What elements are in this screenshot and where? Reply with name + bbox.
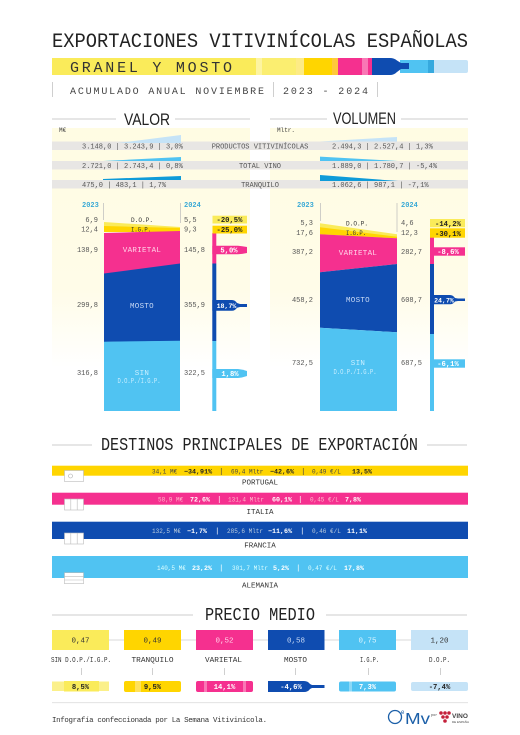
destination: francia: 285,6 Mltr xyxy=(227,528,263,535)
heading: valor: VALOR xyxy=(124,111,170,129)
side bars: valor variation: 18,7% xyxy=(217,303,236,310)
chart: volumen: VARIETAL xyxy=(339,250,377,258)
price variation tags: 7,3% xyxy=(359,684,377,692)
chart: valor: 12,4 xyxy=(81,226,98,234)
chart: valor: D.O.P. xyxy=(131,217,153,224)
price boxes: 1,20 xyxy=(430,638,449,646)
destination: alemania: 17,8% xyxy=(344,565,365,573)
destination: francia: 132,5 M€ xyxy=(152,528,181,535)
side bars: valor variation xyxy=(212,216,247,411)
side bars: volumen variation: -14,2% xyxy=(435,221,462,229)
chart: volumen: 282,7 xyxy=(401,249,422,257)
destination: francia: −11,6% xyxy=(268,528,293,536)
destination: francia: 0,46 €/L xyxy=(312,528,341,535)
chart: volumen: 732,5 xyxy=(292,360,313,368)
destination: italia: | xyxy=(298,496,303,504)
comparison rows: 475,0 | 483,1 | 1,7% xyxy=(82,182,167,190)
chart: volumen: I.G.P. xyxy=(346,230,366,237)
logo: vino de españa xyxy=(431,711,469,724)
chart: valor: VARIETAL xyxy=(123,247,161,255)
destination: alemania: 140,5 M€ xyxy=(157,565,186,572)
comparison rows: PRODUCTOS VITIVINÍCOLAS xyxy=(212,142,308,152)
chart: volumen: 687,5 xyxy=(401,360,422,368)
destination: portugal: −34,91% xyxy=(184,468,213,476)
logo: oemv xyxy=(388,710,430,728)
logo: oemv: e xyxy=(401,710,405,716)
destination: portugal: −42,6% xyxy=(270,468,295,476)
comparison rows: TRANQUILO xyxy=(241,182,279,190)
chart: volumen: SIN xyxy=(351,360,365,368)
destination: italia: | xyxy=(217,496,222,504)
price variation tags: 14,1% xyxy=(214,684,236,692)
chart: valor: 5,5 xyxy=(184,217,197,225)
comparison rows: 1.889,0 | 1.780,7 | -5,4% xyxy=(332,163,438,171)
chart: valor: 2023 xyxy=(82,202,99,210)
side bars: valor variation: -20,5% xyxy=(217,217,243,225)
price boxes xyxy=(52,630,468,650)
chart: valor: 2024 xyxy=(184,202,201,210)
units: M€ xyxy=(59,127,67,134)
chart: volumen: D.O.P./I.G.P. xyxy=(334,369,376,377)
destination: alemania: 0,47 €/L xyxy=(308,565,337,572)
chart: valor: 145,8 xyxy=(184,247,205,255)
destination: francia: −1,7% xyxy=(187,528,208,536)
chart: valor: 299,8 xyxy=(77,302,98,310)
logo: oemv: Mv xyxy=(405,711,430,728)
side bars: valor variation: 5,0% xyxy=(220,248,238,256)
destination: italia xyxy=(52,493,468,517)
heading: precio medio: PRECIO MEDIO xyxy=(205,605,315,626)
price variation tags xyxy=(52,681,468,692)
title: EXPORTACIONES VITIVINÍCOLAS ESPAÑOLAS xyxy=(52,29,468,54)
destination: portugal xyxy=(52,466,468,488)
price category labels: MOSTO xyxy=(284,657,307,665)
destination: alemania xyxy=(52,556,468,591)
chart: volumen: 387,2 xyxy=(292,249,313,257)
side bars: valor variation: 1,8% xyxy=(221,371,239,379)
destination: italia: 60,1% xyxy=(272,496,293,504)
chart: valor: 355,9 xyxy=(184,302,205,310)
chart: volumen: 458,2 xyxy=(292,297,313,305)
destination: italia: 72,6% xyxy=(190,496,211,504)
destination: alemania: 301,7 Mltr xyxy=(232,565,268,572)
comparison rows xyxy=(52,135,468,190)
chart: valor: 316,8 xyxy=(77,370,98,378)
destination: portugal: 0,49 €/L xyxy=(312,468,341,476)
subtitle: ACUMULADO ANUAL NOVIEMBRE xyxy=(70,87,264,98)
destination: portugal: | xyxy=(219,468,224,476)
chart: valor: MOSTO xyxy=(130,303,154,311)
destination: italia: ITALIA xyxy=(246,509,274,517)
price boxes: 0,52 xyxy=(215,638,234,646)
price boxes: 0,58 xyxy=(287,638,305,646)
destination: alemania: 23,2% xyxy=(192,565,213,573)
price category labels: SIN D.O.P./I.G.P. xyxy=(51,657,111,665)
units xyxy=(59,127,295,134)
destination: francia: | xyxy=(300,528,305,536)
price variation tags: -7,4% xyxy=(429,684,451,692)
price variation tags: -4,6% xyxy=(280,684,302,692)
side bars: volumen variation: -8,6% xyxy=(437,249,459,257)
price variation tags: 9,5% xyxy=(144,684,162,692)
comparison rows: TOTAL VINO xyxy=(239,163,281,171)
destination: portugal: | xyxy=(301,468,306,476)
destination: portugal: 69,4 Mltr xyxy=(231,468,264,476)
chart: volumen: 2023 xyxy=(297,202,314,210)
destination: francia: 11,1% xyxy=(347,528,368,536)
destination: portugal: PORTUGAL xyxy=(242,480,278,488)
destination: francia: | xyxy=(215,528,220,536)
destination: alemania: | xyxy=(296,565,301,573)
destination: italia: 131,4 Mltr xyxy=(228,496,264,504)
chart: valor: SIN xyxy=(135,370,149,378)
chart: valor: 138,9 xyxy=(77,247,98,255)
logo: vino de españa: por xyxy=(431,713,437,718)
comparison rows: 2.494,3 | 2.527,4 | 1,3% xyxy=(332,144,434,152)
banner: granel y mosto: GRANEL Y MOSTO xyxy=(70,60,232,77)
price category labels xyxy=(51,657,450,675)
units: Mltr. xyxy=(277,127,295,134)
comparison rows: 3.148,0 | 3.243,9 | 3,0% xyxy=(82,144,184,152)
comparison rows: 1.062,6 | 987,1 | -7,1% xyxy=(332,182,429,190)
destination: italia: 7,8% xyxy=(345,496,362,504)
chart: volumen: 4,6 xyxy=(401,220,414,228)
chart: volumen: 12,3 xyxy=(401,230,418,238)
side bars: volumen variation: -30,1% xyxy=(435,231,462,239)
chart: volumen: 2024 xyxy=(401,202,418,210)
subtitle: 2023 - 2024 xyxy=(283,87,368,98)
side bars: volumen variation: -6,1% xyxy=(437,361,459,369)
destination: alemania: | xyxy=(219,565,224,573)
side bars: valor variation: -25,0% xyxy=(217,227,243,235)
destination: francia: FRANCIA xyxy=(244,543,276,551)
chart: valor: 322,5 xyxy=(184,370,205,378)
side bars: volumen variation: 24,7% xyxy=(434,298,454,304)
price category labels: VARIETAL xyxy=(205,657,243,665)
chart: volumen: D.O.P. xyxy=(346,220,368,228)
destination: francia xyxy=(52,522,468,551)
destination: alemania: 5,2% xyxy=(273,565,290,573)
comparison rows: 2.721,0 | 2.743,4 | 0,8% xyxy=(82,163,184,171)
chart: valor: I.G.P. xyxy=(131,226,151,234)
price boxes: 0,49 xyxy=(143,638,162,646)
chart: valor: 9,3 xyxy=(184,226,197,234)
price category labels: TRANQUILO xyxy=(132,657,174,665)
chart: valor: D.O.P./I.G.P. xyxy=(118,378,160,386)
price boxes: 0,75 xyxy=(358,638,377,646)
logo: vino de españa: VINO xyxy=(452,713,468,720)
price category labels: I.G.P. xyxy=(360,657,379,665)
destination: italia: 0,45 €/L xyxy=(310,496,339,504)
chart: volumen: MOSTO xyxy=(346,297,370,305)
chart: volumen xyxy=(292,202,422,411)
chart: volumen: 608,7 xyxy=(401,297,422,305)
chart: volumen: 17,6 xyxy=(296,230,313,238)
side bars: volumen variation xyxy=(430,219,465,411)
chart: volumen: 5,3 xyxy=(300,220,313,228)
subtitle xyxy=(52,82,378,98)
destination: portugal: 13,5% xyxy=(352,468,373,476)
price boxes: 0,47 xyxy=(71,638,90,646)
footer credit: Infografía confeccionada por La Semana Vitivinícola. xyxy=(52,717,267,725)
logo: vino de españa: DE ESPAÑA xyxy=(452,719,469,724)
destination: alemania: ALEMANIA xyxy=(242,583,278,591)
panel backgrounds xyxy=(52,128,468,420)
destination: italia: 58,9 M€ xyxy=(158,496,184,504)
heading: volumen: VOLUMEN xyxy=(333,110,396,128)
chart: valor xyxy=(77,202,205,411)
price variation tags: 8,5% xyxy=(72,684,90,692)
destination: portugal: 34,1 M€ xyxy=(152,468,178,476)
heading: destinos principales: DESTINOS PRINCIPALES DE EXPORTACIÓN xyxy=(101,434,418,456)
banner: granel y mosto xyxy=(52,58,468,77)
price category labels: D.O.P. xyxy=(429,657,450,665)
chart: valor: 6,9 xyxy=(85,217,98,225)
